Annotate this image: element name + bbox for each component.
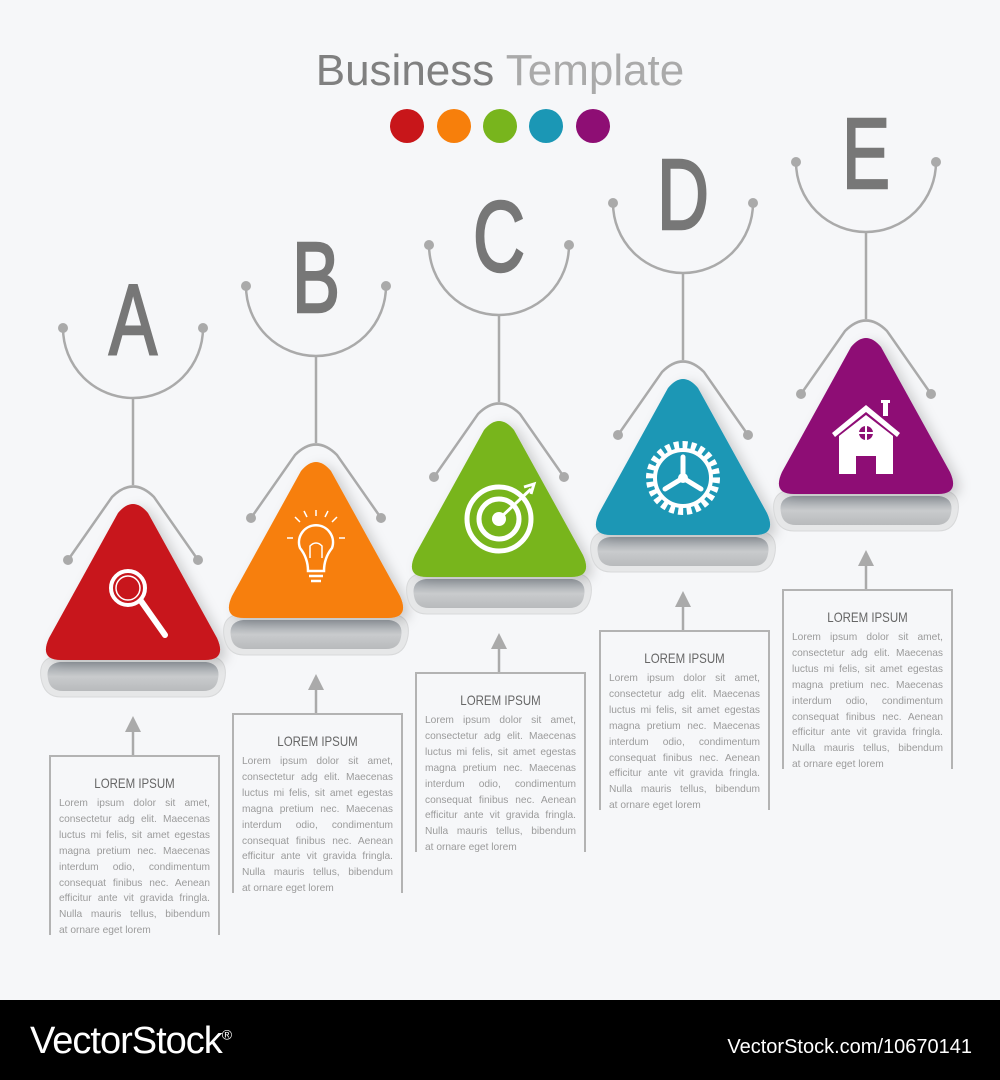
text box C: luctus mi felis, sit amet egestas <box>425 747 576 758</box>
text box D: at ornare eget lorem <box>609 800 701 811</box>
step E <box>774 98 958 589</box>
text box B: Lorem ipsum dolor sit amet, <box>242 756 393 767</box>
text box E <box>782 589 953 769</box>
text box A: Lorem ipsum dolor sit amet, <box>59 798 210 809</box>
text box E: LOREM IPSUM <box>827 609 908 625</box>
text box E: Lorem ipsum dolor sit amet, <box>792 632 943 643</box>
letter D: D <box>657 139 709 251</box>
arrow A <box>125 716 141 755</box>
text box A: Nulla mauris tellus, bibendum <box>59 909 210 920</box>
text box D: Nulla mauris tellus, bibendum <box>609 784 760 795</box>
text box B: efficitur ante vit gravida fringla. <box>242 851 393 862</box>
text box C: LOREM IPSUM <box>460 692 541 708</box>
text box B: consequat finibus nec. Aenean <box>242 836 393 847</box>
triangle C <box>412 421 586 577</box>
arrow C <box>491 633 507 672</box>
text box E: Nulla mauris tellus, bibendum <box>792 743 943 754</box>
text box A: efficitur ante vit gravida fringla. <box>59 893 210 904</box>
text box C: Lorem ipsum dolor sit amet, <box>425 715 576 726</box>
color dots <box>390 109 610 143</box>
text box E: interdum odio, condimentum <box>792 696 943 707</box>
text box B: LOREM IPSUM <box>277 733 358 749</box>
triangle D <box>596 379 770 535</box>
icon: magnifier <box>111 571 165 635</box>
text box A: interdum odio, condimentum <box>59 862 210 873</box>
text box D: consequat finibus nec. Aenean <box>609 753 760 764</box>
text box B: luctus mi felis, sit amet egestas <box>242 788 393 799</box>
text box D <box>599 630 770 810</box>
text box A: at ornare eget lorem <box>59 925 151 936</box>
letter E: E <box>842 98 890 210</box>
text box A: LOREM IPSUM <box>94 775 175 791</box>
step D <box>591 139 775 630</box>
text box B: consectetur adg elit. Maecenas <box>242 772 393 783</box>
text box A: consectetur adg elit. Maecenas <box>59 814 210 825</box>
icon: bulb <box>287 510 345 581</box>
footer url: VectorStock.com/10670141 <box>727 1036 972 1058</box>
text box D: consectetur adg elit. Maecenas <box>609 689 760 700</box>
text box E: consequat finibus nec. Aenean <box>792 712 943 723</box>
text box D: magna pretium nec. Maecenas <box>609 721 760 732</box>
arrow D <box>675 591 691 630</box>
text box D: Lorem ipsum dolor sit amet, <box>609 673 760 684</box>
text box C: interdum odio, condimentum <box>425 779 576 790</box>
text box C: consequat finibus nec. Aenean <box>425 795 576 806</box>
text box C <box>415 672 586 852</box>
text box A: magna pretium nec. Maecenas <box>59 846 210 857</box>
text box E: efficitur ante vit gravida fringla. <box>792 727 943 738</box>
letter A: A <box>109 264 157 376</box>
text box E: at ornare eget lorem <box>792 759 884 770</box>
text box B: at ornare eget lorem <box>242 883 334 894</box>
text box D: luctus mi felis, sit amet egestas <box>609 705 760 716</box>
text box C: magna pretium nec. Maecenas <box>425 763 576 774</box>
text box A <box>49 755 220 935</box>
step A <box>41 264 225 755</box>
triangle B <box>229 462 403 618</box>
letter B: B <box>292 222 340 334</box>
text box B: magna pretium nec. Maecenas <box>242 804 393 815</box>
text box B: Nulla mauris tellus, bibendum <box>242 867 393 878</box>
footer logo: VectorStock® <box>30 1020 231 1062</box>
icon: target <box>467 484 534 551</box>
text box D: LOREM IPSUM <box>644 650 725 666</box>
step B <box>224 222 408 713</box>
footer <box>0 1000 1000 1080</box>
triangle A <box>46 504 220 660</box>
text box C: consectetur adg elit. Maecenas <box>425 731 576 742</box>
text box E: magna pretium nec. Maecenas <box>792 680 943 691</box>
arrow B <box>308 674 324 713</box>
step C <box>407 181 591 672</box>
text box E: consectetur adg elit. Maecenas <box>792 648 943 659</box>
icon: gear <box>650 445 716 511</box>
title: Business Template <box>316 46 684 95</box>
text box C: Nulla mauris tellus, bibendum <box>425 826 576 837</box>
text box D: efficitur ante vit gravida fringla. <box>609 768 760 779</box>
icon: house <box>832 400 900 474</box>
text box A: luctus mi felis, sit amet egestas <box>59 830 210 841</box>
text box B: interdum odio, condimentum <box>242 820 393 831</box>
arrow E <box>858 550 874 589</box>
text box C: efficitur ante vit gravida fringla. <box>425 810 576 821</box>
text box A: consequat finibus nec. Aenean <box>59 878 210 889</box>
text box C: at ornare eget lorem <box>425 842 517 853</box>
triangle E <box>779 338 953 494</box>
letter C: C <box>473 181 525 293</box>
text box B <box>232 713 403 893</box>
text box D: interdum odio, condimentum <box>609 737 760 748</box>
text box E: luctus mi felis, sit amet egestas <box>792 664 943 675</box>
